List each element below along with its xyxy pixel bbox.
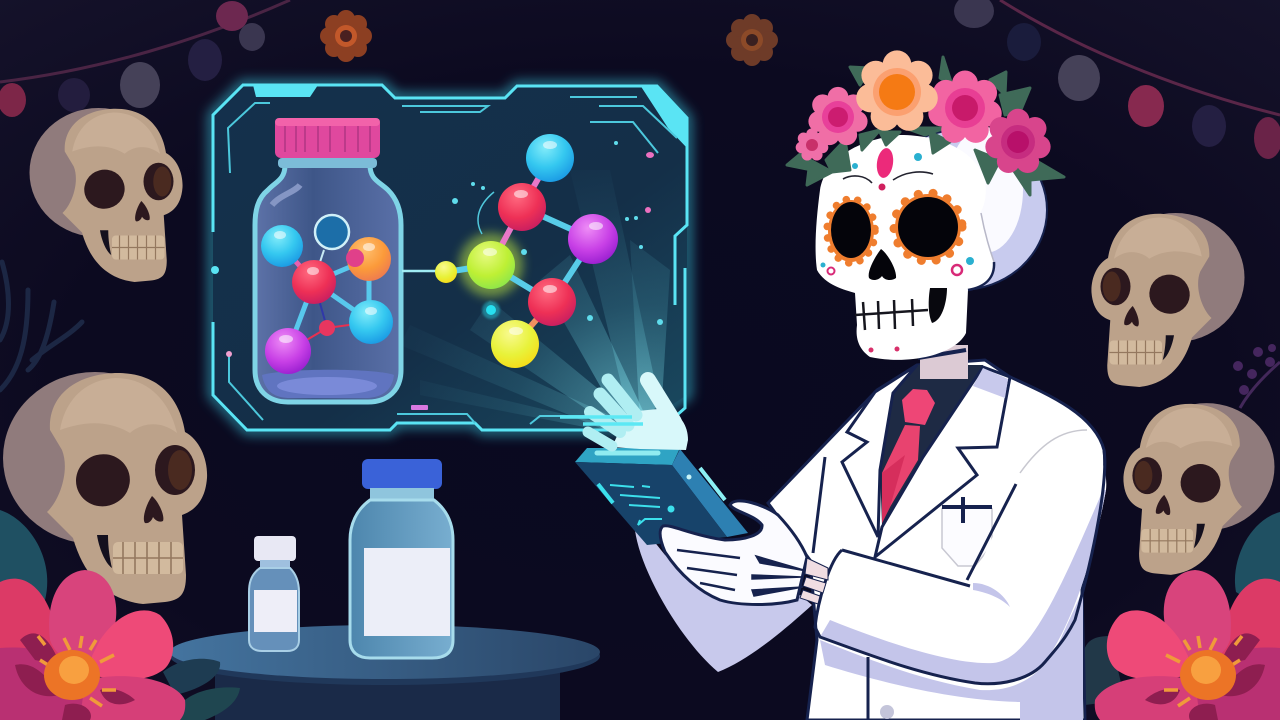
scientist bbox=[560, 50, 1106, 720]
table bbox=[170, 625, 600, 720]
light beam from hand bbox=[400, 170, 670, 432]
cheek outline bbox=[968, 262, 994, 290]
necktie bbox=[882, 389, 935, 523]
forehead decoration bbox=[843, 147, 933, 190]
cranium highlight bbox=[947, 127, 1023, 253]
skull: upper right bbox=[1091, 213, 1244, 387]
sleeve crease bbox=[1020, 430, 1087, 473]
skull: upper left bbox=[30, 108, 183, 282]
panel: hologram screen bbox=[211, 85, 687, 430]
sleeve shading bbox=[820, 490, 1106, 684]
face edge lines bbox=[981, 213, 994, 262]
icon: background leaves left bbox=[0, 262, 82, 390]
icon: background sprig right bbox=[1233, 344, 1280, 408]
small vial bbox=[249, 536, 299, 651]
hologram glow halo bbox=[213, 85, 687, 430]
pink flower bbox=[808, 87, 868, 145]
left forearm sleeve bbox=[635, 530, 812, 672]
icon: dark leaves by table bbox=[163, 659, 240, 720]
connector line bbox=[402, 270, 446, 272]
small pink flower bbox=[796, 128, 828, 161]
icon: red flower lower left bbox=[0, 570, 185, 720]
glow behind green atom bbox=[459, 233, 523, 297]
skull teeth bbox=[855, 299, 928, 330]
coat seam line bbox=[813, 457, 825, 553]
cranium back bbox=[873, 130, 1047, 290]
skeletal lower hand bbox=[660, 501, 828, 604]
skull face bbox=[816, 135, 994, 360]
icon: teal leaf lower left bbox=[0, 510, 47, 640]
flower crown bbox=[787, 50, 1064, 195]
right sleeve bbox=[817, 430, 1106, 684]
large pink flower bbox=[928, 71, 1002, 143]
skull: lower right bbox=[1123, 403, 1274, 575]
neck vertebrae bbox=[918, 345, 968, 379]
icon: background flower right bbox=[726, 14, 778, 66]
dark shirt bbox=[880, 365, 983, 525]
molecule in jar bbox=[261, 215, 393, 374]
icon: teal leaf lower right bbox=[1235, 512, 1280, 620]
icon: dark leaf beside right flower bbox=[1083, 636, 1125, 705]
lapel shading bbox=[973, 368, 1008, 398]
coat left lapel bbox=[842, 365, 917, 537]
garland: right bunting bbox=[954, 0, 1280, 159]
eye socket right with scalloped ring bbox=[894, 193, 962, 261]
coat placket and button bbox=[868, 657, 894, 720]
skull: lower left bbox=[3, 372, 207, 604]
tablet bbox=[575, 448, 748, 545]
hologram outline bbox=[213, 85, 687, 430]
coat pocket with pen bbox=[942, 497, 992, 566]
frame dots bbox=[211, 266, 428, 410]
eye socket left with scalloped ring bbox=[827, 199, 875, 263]
coat right lapel bbox=[875, 367, 1010, 557]
molecule in hologram bbox=[435, 134, 663, 368]
thick frame accents bbox=[253, 85, 687, 148]
lab coat body bbox=[768, 360, 1105, 720]
crown leaves bbox=[787, 57, 1064, 195]
jaw gap bbox=[929, 288, 947, 323]
icon: red flower lower right bbox=[1095, 570, 1280, 720]
inner circuit lines bbox=[228, 97, 677, 424]
garland: left bunting bbox=[0, 0, 290, 117]
glass jar bbox=[255, 118, 401, 402]
hologram fill bbox=[213, 85, 687, 430]
skull nose bbox=[869, 249, 896, 280]
cheek decorations bbox=[820, 257, 974, 352]
icon: background flower left bbox=[320, 10, 372, 62]
skeletal raised hand bbox=[560, 380, 688, 450]
sleeve outlines bbox=[815, 450, 1105, 684]
elbow crease bbox=[973, 583, 1010, 607]
large bottle bbox=[350, 459, 453, 658]
peach flower bbox=[856, 50, 938, 131]
coat shading bbox=[820, 590, 1083, 720]
magenta flower bbox=[985, 109, 1051, 173]
